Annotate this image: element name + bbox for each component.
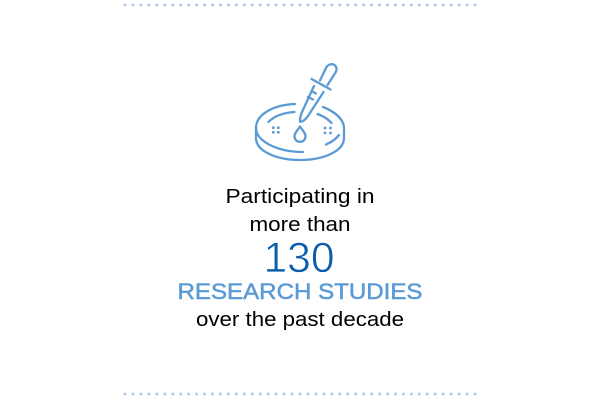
heading: RESEARCH STUDIES: RESEARCH STUDIES (178, 279, 422, 304)
text: Participating in: Participating in (226, 186, 374, 208)
water drop (294, 126, 306, 142)
petri dish (256, 104, 344, 160)
text: over the past decade: over the past decade (196, 309, 404, 331)
sparkle dots left (272, 126, 280, 134)
big number: 130: 130 (264, 234, 334, 282)
dropper (300, 64, 337, 122)
icon: petri dish with dropper (256, 64, 344, 160)
sparkle dots right (324, 127, 332, 134)
text: more than: more than (250, 214, 350, 236)
